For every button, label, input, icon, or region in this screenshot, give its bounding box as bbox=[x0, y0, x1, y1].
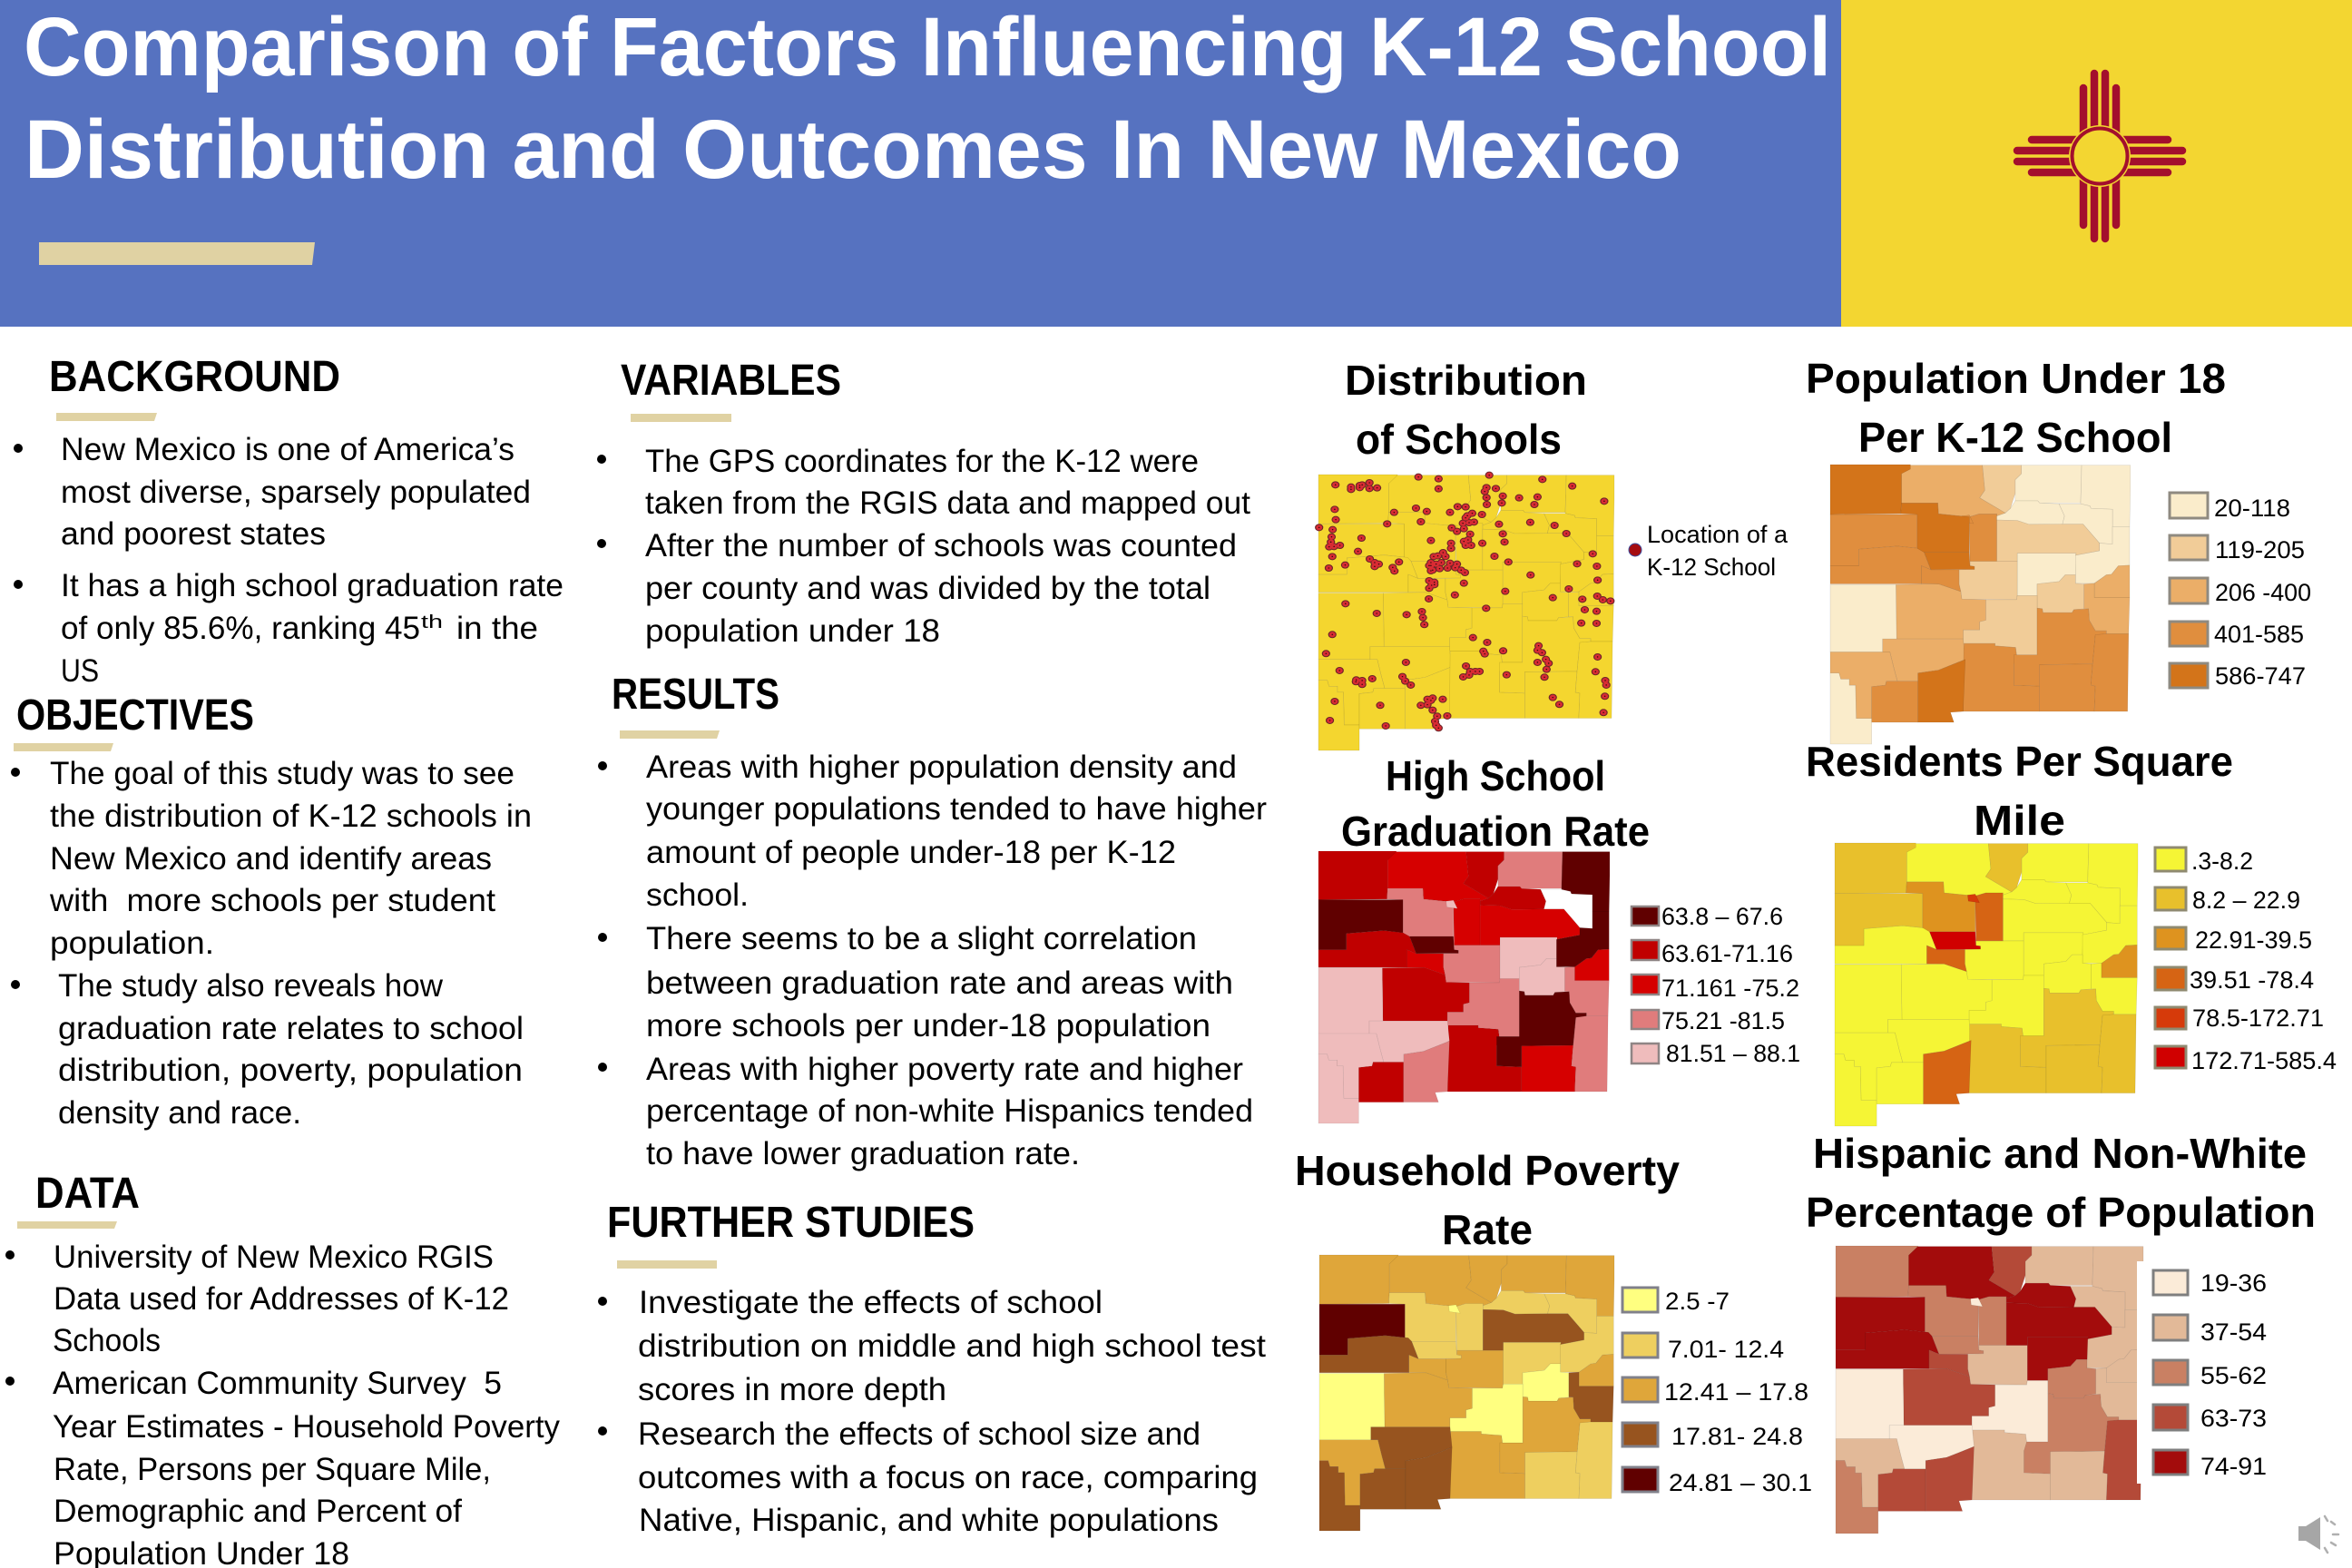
text: background bullets: and poorest states bbox=[61, 516, 326, 552]
text: objectives bullets: The study also reveals how bbox=[58, 968, 444, 1004]
legend: population under 18 per school: 20-118 bbox=[2214, 495, 2290, 522]
legend: school location: K-12 School bbox=[1647, 554, 1776, 581]
text: further studies bullets: Investigate the effects of school bbox=[639, 1285, 1102, 1320]
legend: household poverty rate bbox=[1622, 1288, 1812, 1496]
heading: residents per square mile bbox=[1806, 738, 2233, 844]
text: further studies bullets: scores in more depth bbox=[638, 1372, 946, 1407]
heading: population under 18 bbox=[1806, 355, 2226, 461]
heading: background: BACKGROUND bbox=[49, 353, 340, 401]
title bbox=[24, 1, 1831, 196]
text: objectives bullets: density and race. bbox=[58, 1095, 301, 1131]
heading: residents per square mile: Mile bbox=[1974, 797, 2065, 844]
panel: further studies bbox=[598, 1199, 1266, 1538]
legend: graduation rate: 75.21 -81.5 bbox=[1661, 1007, 1785, 1034]
icon: speaker bbox=[2298, 1516, 2338, 1553]
text: objectives bullets: graduation rate relates to school bbox=[58, 1011, 524, 1046]
text: further studies bullets: Native, Hispanic, and white populations bbox=[639, 1503, 1219, 1538]
header banner bbox=[0, 0, 1841, 327]
heading: population under 18: Per K-12 School bbox=[1858, 414, 2172, 461]
text: data bullets: American Community Survey 5 bbox=[53, 1366, 502, 1401]
panel: results bbox=[598, 671, 1267, 1171]
text: results bullets: school. bbox=[646, 877, 749, 913]
text: further studies bullets: Research the effects of school size and bbox=[638, 1416, 1200, 1452]
panel: data bbox=[5, 1170, 560, 1568]
legend: hispanic and non-white percentage: 19-36 bbox=[2200, 1269, 2267, 1297]
text: variables bullets: per county and was divided by the total bbox=[645, 571, 1210, 606]
text: variables bullets: population under 18 bbox=[645, 613, 940, 649]
accent bar: further studies bbox=[617, 1260, 717, 1269]
legend: school location: Location of a bbox=[1647, 521, 1788, 548]
legend: residents per square mile: 39.51 -78.4 bbox=[2190, 966, 2314, 994]
map: residents per square mile bbox=[1835, 843, 2138, 1126]
text: objectives bullets: The goal of this study was to see bbox=[50, 756, 514, 791]
legend: graduation rate: 81.51 – 88.1 bbox=[1666, 1040, 1800, 1067]
title: Comparison of Factors Influencing K-12 School bbox=[24, 1, 1831, 93]
legend: school location bbox=[1629, 521, 1788, 581]
text: background bullets: New Mexico is one of America’s bbox=[61, 432, 514, 467]
text: results bullets: younger populations tended to have higher bbox=[646, 791, 1267, 827]
text: background bullets bbox=[14, 432, 564, 689]
legend: residents per square mile: 8.2 – 22.9 bbox=[2192, 887, 2300, 914]
text: data bullets: Schools bbox=[53, 1323, 161, 1358]
map: hispanic and non-white percentage bbox=[1836, 1246, 2143, 1534]
panel: residents per square mile bbox=[1806, 738, 2337, 1126]
legend: population under 18 per school: 586-747 bbox=[2215, 662, 2306, 690]
heading: residents per square mile: Residents Per Square bbox=[1806, 738, 2233, 785]
panel: background bbox=[14, 353, 564, 689]
heading: hispanic and non-white percentage bbox=[1806, 1130, 2316, 1236]
text: objectives bullets: New Mexico and identify areas bbox=[50, 841, 492, 877]
accent bar: variables bbox=[631, 414, 731, 422]
title: Distribution and Outcomes In New Mexico bbox=[24, 103, 1681, 196]
text: data bullets bbox=[5, 1240, 560, 1568]
legend: hispanic and non-white percentage: 37-54 bbox=[2200, 1318, 2267, 1346]
text: data bullets: Demographic and Percent of bbox=[54, 1494, 462, 1529]
legend: population under 18 per school: 119-205 bbox=[2215, 536, 2305, 564]
map: population under 18 per school bbox=[1830, 465, 2131, 744]
legend: household poverty rate: 24.81 – 30.1 bbox=[1669, 1469, 1812, 1496]
accent bar: background bbox=[56, 413, 157, 421]
panel: population under 18 per school bbox=[1806, 355, 2311, 744]
legend: population under 18 per school bbox=[2170, 493, 2311, 690]
text: data bullets: Year Estimates - Household Poverty bbox=[53, 1409, 560, 1445]
heading: graduation rate: Graduation Rate bbox=[1341, 808, 1650, 855]
legend: household poverty rate: 2.5 -7 bbox=[1665, 1288, 1730, 1315]
text: data bullets: Data used for Addresses of K-12 bbox=[54, 1281, 509, 1317]
legend: residents per square mile: 22.91-39.5 bbox=[2195, 926, 2312, 954]
legend: household poverty rate: 7.01- 12.4 bbox=[1668, 1336, 1784, 1363]
text: results bullets: to have lower graduation rate. bbox=[646, 1136, 1080, 1171]
panel: variables bbox=[597, 357, 1250, 649]
accent bar: data bbox=[17, 1221, 117, 1229]
legend: graduation rate: 71.161 -75.2 bbox=[1661, 975, 1799, 1002]
legend: residents per square mile: 172.71-585.4 bbox=[2191, 1047, 2337, 1074]
heading: variables: VARIABLES bbox=[621, 357, 841, 405]
legend: population under 18 per school: 401-585 bbox=[2214, 621, 2304, 648]
legend: household poverty rate: 12.41 – 17.8 bbox=[1664, 1378, 1808, 1406]
heading: distribution of schools: Distribution bbox=[1345, 357, 1587, 404]
text: further studies bullets: outcomes with a focus on race, comparing bbox=[638, 1460, 1258, 1495]
heading: objectives: OBJECTIVES bbox=[16, 691, 254, 740]
heading: hispanic and non-white percentage: Percentage of Population bbox=[1806, 1189, 2316, 1236]
text: background bullets: th bbox=[421, 612, 443, 632]
text: variables bullets: taken from the RGIS data and mapped out bbox=[645, 485, 1250, 521]
heading: household poverty rate bbox=[1295, 1147, 1680, 1253]
heading: household poverty rate: Rate bbox=[1442, 1206, 1533, 1253]
text: data bullets: Rate, Persons per Square Mile, bbox=[54, 1452, 491, 1487]
text: results bullets bbox=[598, 750, 1267, 1171]
heading: distribution of schools: of Schools bbox=[1356, 416, 1562, 463]
legend: residents per square mile: .3-8.2 bbox=[2191, 848, 2253, 875]
text: background bullets: It has a high school graduation rate bbox=[61, 568, 564, 603]
text: objectives bullets bbox=[11, 756, 532, 1131]
text: variables bullets bbox=[597, 444, 1250, 649]
legend: graduation rate: 63.61-71.16 bbox=[1661, 940, 1793, 967]
text: results bullets: between graduation rate and areas with bbox=[646, 965, 1233, 1001]
panel: hispanic and non-white percentage bbox=[1806, 1130, 2316, 1534]
legend: graduation rate: 63.8 – 67.6 bbox=[1661, 903, 1783, 930]
legend: hispanic and non-white percentage bbox=[2153, 1269, 2267, 1480]
map: graduation rate bbox=[1318, 851, 1610, 1123]
text: background bullets: in the bbox=[456, 611, 538, 646]
text: further studies bullets: distribution on middle and high school test bbox=[638, 1328, 1266, 1364]
text: results bullets: amount of people under-18 per K-12 bbox=[646, 835, 1176, 870]
text: further studies bullets bbox=[598, 1285, 1266, 1538]
panel: high school graduation rate bbox=[1318, 752, 1800, 1123]
legend: graduation rate bbox=[1632, 903, 1800, 1067]
text: results bullets: percentage of non-white Hispanics tended bbox=[646, 1093, 1253, 1129]
text: results bullets: more schools per under-18 population bbox=[646, 1008, 1210, 1044]
accent bar: results bbox=[620, 730, 720, 739]
text: data bullets: University of New Mexico RGIS bbox=[54, 1240, 494, 1275]
text: background bullets: of only 85.6%, ranking 45 bbox=[61, 611, 420, 646]
text: objectives bullets: distribution, poverty, population bbox=[58, 1053, 523, 1088]
heading: graduation rate: High School bbox=[1386, 752, 1605, 799]
legend: residents per square mile bbox=[2155, 848, 2337, 1074]
heading: graduation rate bbox=[1341, 752, 1650, 855]
text: results bullets: There seems to be a slight correlation bbox=[646, 921, 1197, 956]
text: background bullets: US bbox=[61, 653, 99, 689]
legend: hispanic and non-white percentage: 55-62 bbox=[2200, 1362, 2267, 1389]
map: school locations bbox=[1318, 475, 1614, 750]
text: results bullets: Areas with higher population density and bbox=[646, 750, 1237, 785]
text: background bullets: most diverse, sparsely populated bbox=[61, 475, 531, 510]
title accent bar bbox=[39, 242, 315, 265]
icon: New Mexico flag bbox=[1841, 0, 2352, 327]
heading: data: DATA bbox=[35, 1170, 140, 1218]
panel: household poverty rate bbox=[1295, 1147, 1812, 1531]
text: variables bullets: After the number of schools was counted bbox=[645, 528, 1237, 564]
heading: further studies: FURTHER STUDIES bbox=[607, 1199, 975, 1247]
text: variables bullets: The GPS coordinates for the K-12 were bbox=[645, 444, 1199, 479]
legend: hispanic and non-white percentage: 74-91 bbox=[2200, 1453, 2267, 1480]
text: objectives bullets: with more schools per student bbox=[49, 883, 495, 918]
legend: household poverty rate: 17.81- 24.8 bbox=[1671, 1423, 1803, 1450]
heading: hispanic and non-white percentage: Hispanic and Non-White bbox=[1813, 1130, 2307, 1177]
legend: residents per square mile: 78.5-172.71 bbox=[2192, 1004, 2324, 1032]
heading: results: RESULTS bbox=[612, 671, 779, 719]
accent bar: objectives bbox=[14, 743, 113, 751]
heading: distribution of schools bbox=[1345, 357, 1587, 463]
panel: distribution of schools bbox=[1318, 357, 1788, 750]
legend: population under 18 per school: 206 -400 bbox=[2215, 579, 2311, 606]
text: objectives bullets: the distribution of K-12 schools in bbox=[50, 799, 532, 834]
heading: household poverty rate: Household Poverty bbox=[1295, 1147, 1680, 1194]
legend: hispanic and non-white percentage: 63-73 bbox=[2200, 1405, 2267, 1432]
map: household poverty rate bbox=[1319, 1255, 1614, 1531]
panel: objectives bbox=[11, 691, 532, 1131]
heading: population under 18: Population Under 18 bbox=[1806, 355, 2226, 402]
text: objectives bullets: population. bbox=[50, 926, 214, 961]
text: results bullets: Areas with higher poverty rate and higher bbox=[646, 1052, 1243, 1087]
